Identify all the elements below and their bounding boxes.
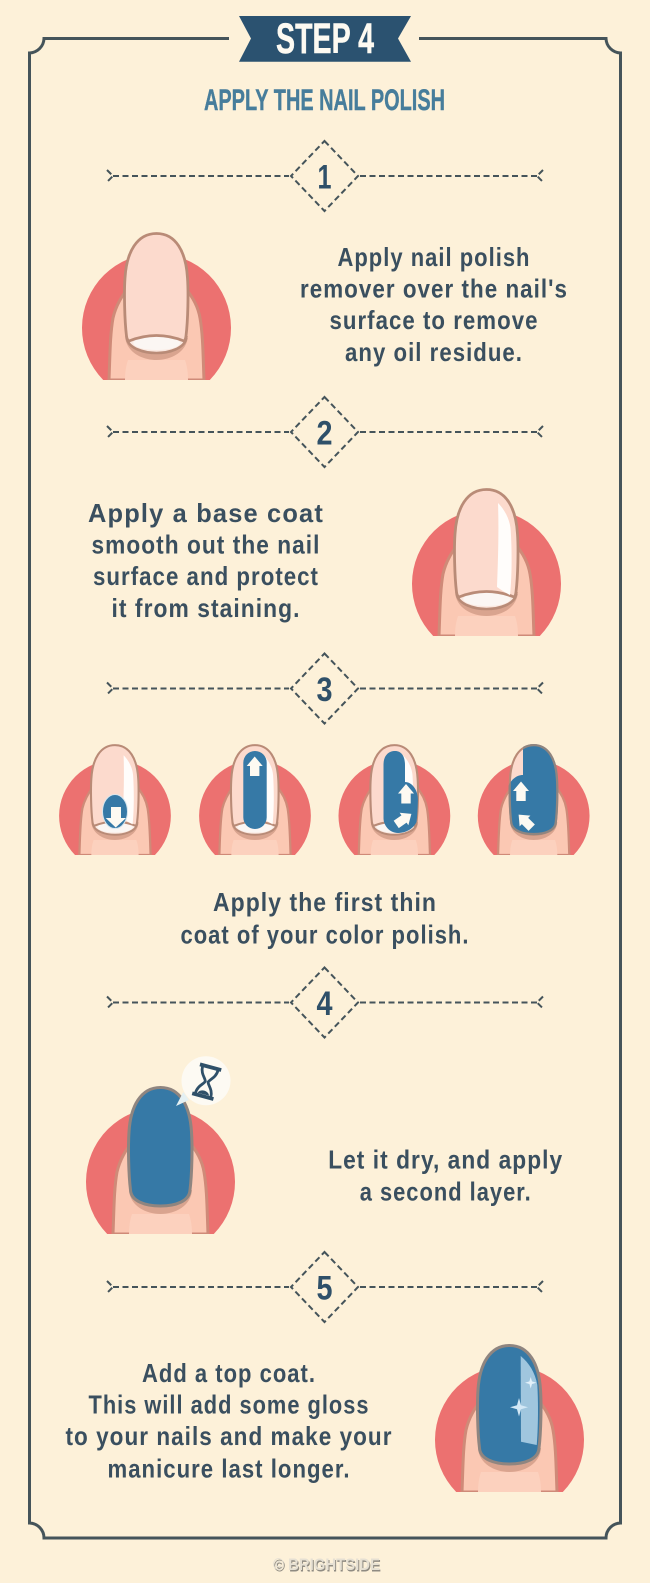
- illustration: drying nail: [86, 1088, 235, 1238]
- text: step 5: [66, 1358, 392, 1484]
- text: step 3: Apply the first thin: [213, 887, 437, 917]
- text: step 5: manicure last longer.: [108, 1454, 350, 1484]
- illustration: bare nail with remover: [82, 234, 231, 384]
- illustration: centre stroke of polish: [199, 745, 311, 858]
- text: step 1: remover over the nail's: [300, 274, 568, 304]
- illustration: base coat nail: [412, 490, 561, 640]
- text: step 1: [300, 242, 568, 367]
- watermark: © BRIGHTSIDE: [273, 1556, 380, 1574]
- text: step 2: Apply a base coat: [88, 498, 324, 528]
- illustration: top coat nail with gloss: [435, 1346, 584, 1496]
- divider: number 5: [107, 1252, 543, 1322]
- text: step 5: to your nails and make your: [66, 1421, 392, 1451]
- text: step 2: smooth out the nail: [92, 530, 320, 560]
- divider: number 1: 1: [318, 158, 332, 196]
- text: step 4: a second layer.: [360, 1176, 532, 1206]
- divider: number 5: 5: [316, 1270, 332, 1308]
- text: step 3: [180, 887, 470, 950]
- text: step 1: surface to remove: [330, 305, 538, 335]
- divider: number 3: 3: [316, 671, 332, 709]
- illustration: left stroke of polish: [478, 745, 590, 858]
- divider: number 4: [107, 968, 543, 1038]
- text: step 2: it from staining.: [112, 593, 300, 623]
- divider: number 2: [107, 397, 543, 467]
- text: step 4: Let it dry, and apply: [328, 1144, 563, 1174]
- heading: APPLY THE NAIL POLISH: [204, 84, 445, 117]
- divider: number 2: 2: [316, 414, 332, 452]
- text: step 5: Add a top coat.: [142, 1358, 316, 1388]
- icon: hourglass speech bubble: [176, 1056, 230, 1106]
- text: step 3: coat of your color polish.: [180, 920, 470, 950]
- text: step 1: any oil residue.: [345, 337, 523, 367]
- text: step 2: surface and protect: [93, 561, 319, 591]
- illustration: first stroke of polish: [59, 745, 171, 858]
- title banner: step 4: STEP 4: [276, 15, 374, 63]
- illustration: right stroke of polish: [338, 745, 450, 858]
- text: step 4: [328, 1144, 563, 1206]
- text: step 5: This will add some gloss: [88, 1390, 370, 1420]
- text: step 2: [88, 498, 324, 623]
- divider: number 4: 4: [316, 985, 333, 1023]
- divider: number 1: [107, 141, 543, 211]
- text: step 1: Apply nail polish: [338, 242, 530, 272]
- divider: number 3: [107, 654, 543, 724]
- watermark: © BRIGHTSIDE: [274, 1558, 381, 1576]
